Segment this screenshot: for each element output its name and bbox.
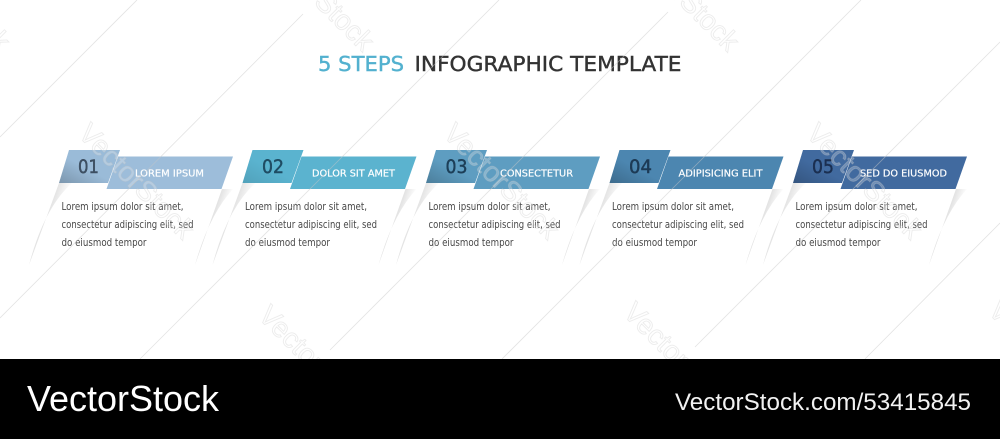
step 1 text: do eiusmod tempor	[62, 238, 147, 249]
step 5 card	[763, 150, 967, 265]
step 2 text	[245, 202, 377, 249]
step 5 text: consectetur adipiscing elit, sed	[796, 220, 928, 231]
step 3 card	[396, 150, 600, 265]
step 3 banner	[474, 156, 600, 189]
step 1 label: LOREM IPSUM	[135, 168, 204, 180]
step 3 text: do eiusmod tempor	[428, 238, 514, 249]
step 2 number tab	[242, 150, 304, 183]
step 4 number: 04	[629, 157, 652, 178]
step 5 label: SED DO EIUSMOD	[860, 168, 947, 180]
step 2 label: DOLOR SIT AMET	[312, 168, 396, 180]
step 5 number: 05	[812, 157, 834, 178]
step 5 number tab	[793, 150, 854, 183]
step 2 banner	[290, 156, 416, 189]
step 3 text: Lorem ipsum dolor sit amet,	[428, 202, 550, 213]
footer image url: VectorStock.com/53415845	[675, 389, 971, 416]
watermark text: VectorStock	[618, 296, 746, 425]
step 2 text: Lorem ipsum dolor sit amet,	[245, 202, 367, 213]
step 3 number: 03	[446, 157, 468, 178]
watermark text: VectorStock	[438, 117, 566, 246]
step 1 text	[62, 202, 194, 249]
step 5 text	[796, 202, 928, 249]
step 5 text: do eiusmod tempor	[796, 238, 881, 249]
step 3 number tab	[426, 150, 487, 183]
step 3 text: consectetur adipiscing elit, sed	[428, 220, 560, 231]
step 1 text: Lorem ipsum dolor sit amet,	[62, 202, 184, 213]
step 2 card	[212, 150, 416, 265]
watermark text: VectorStock	[73, 117, 201, 246]
step 4 text: do eiusmod tempor	[612, 238, 698, 249]
step 4 banner	[657, 156, 784, 189]
step 4 number tab	[610, 150, 670, 183]
title	[318, 52, 682, 76]
step 1 card	[29, 150, 233, 265]
step 3 text	[428, 202, 560, 249]
step 5 banner	[840, 156, 967, 189]
footer brand: VectorStock	[27, 378, 220, 419]
step 5 text: Lorem ipsum dolor sit amet,	[796, 202, 918, 213]
title: 5 STEPS	[318, 52, 404, 76]
title: INFOGRAPHIC TEMPLATE	[414, 52, 682, 76]
step 1 number tab	[59, 150, 120, 183]
step 2 text: do eiusmod tempor	[245, 238, 331, 249]
step 1 number: 01	[78, 157, 99, 178]
step 4 label: ADIPISICING ELIT	[678, 168, 764, 180]
step 4 text: Lorem ipsum dolor sit amet,	[612, 202, 734, 213]
step 2 text: consectetur adipiscing elit, sed	[245, 220, 377, 231]
step 4 text: consectetur adipiscing elit, sed	[612, 220, 744, 231]
step 1 banner	[106, 156, 233, 189]
step 2 number: 02	[262, 157, 284, 178]
step 4 card	[580, 150, 784, 265]
step 3 label: CONSECTETUR	[500, 168, 573, 180]
step 1 text: consectetur adipiscing elit, sed	[62, 220, 194, 231]
watermark text: VectorStock	[801, 117, 929, 246]
step 4 text	[612, 202, 744, 249]
watermark text: VectorStock	[253, 299, 381, 428]
footer bar	[0, 359, 1000, 439]
